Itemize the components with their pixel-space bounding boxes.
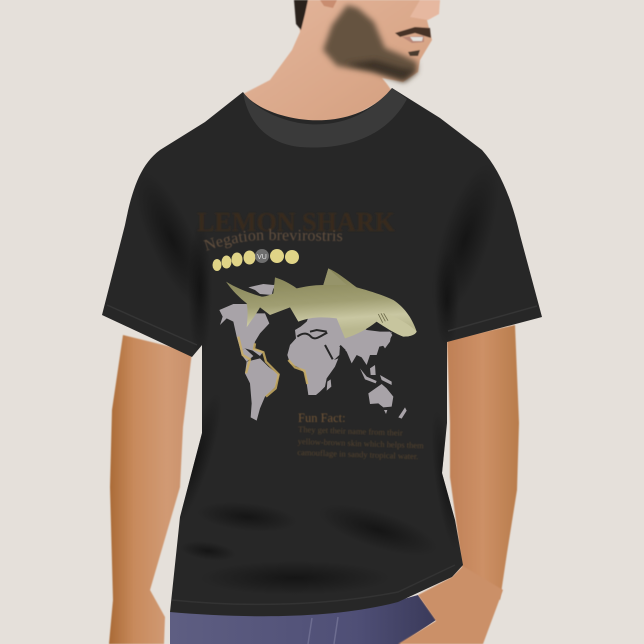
collar — [243, 88, 407, 147]
ear — [320, 0, 337, 8]
waist folds — [220, 509, 274, 525]
print: scientific name: Negation brevirostris — [204, 228, 342, 251]
fun fact heading: Fun Fact: — [298, 411, 346, 425]
model: head and neck — [243, 0, 440, 134]
central america — [241, 348, 253, 362]
greenland / arctic — [248, 283, 293, 295]
print: title: LEMON SHARK — [197, 207, 395, 237]
black t-shirt — [100, 85, 545, 620]
beard — [323, 5, 417, 82]
fun fact body: They get their name from their — [298, 424, 403, 438]
southeast asia islands — [360, 332, 392, 385]
new zealand — [398, 407, 407, 419]
lemon shark — [226, 268, 417, 338]
mouth — [402, 36, 424, 43]
fun fact text block — [297, 411, 425, 461]
jeans — [170, 595, 436, 644]
chin tuft — [408, 50, 420, 56]
mediterranean, black sea, red sea — [297, 330, 345, 359]
sleeve and armpit shadows — [151, 203, 191, 278]
teeth — [410, 37, 423, 41]
fun fact body: camouflage in sandy tropical water. — [297, 447, 419, 461]
side seam shadows — [181, 423, 210, 512]
north america — [219, 304, 269, 356]
eurasia and africa — [287, 313, 392, 395]
sleeve hems — [107, 305, 537, 345]
model: right arm — [447, 325, 519, 600]
dorsal fin shading — [323, 268, 347, 285]
fun fact body: yellow-brown skin which helps them — [298, 436, 424, 450]
model: left arm — [109, 335, 192, 644]
bottom hem — [172, 565, 455, 604]
head underside — [377, 312, 417, 337]
madagascar — [327, 379, 331, 391]
south america — [245, 358, 279, 421]
world range map — [219, 283, 407, 421]
hair — [294, 0, 308, 30]
jawline beard shadow — [345, 60, 416, 80]
nose — [410, 0, 440, 20]
australia — [368, 384, 393, 414]
range: coasts highlighted — [238, 337, 307, 397]
moustache — [395, 27, 431, 38]
conservation status scale — [212, 249, 299, 271]
hand in pocket — [398, 566, 503, 644]
conservation status scale: VU — [257, 254, 267, 261]
jeans fly — [308, 617, 338, 644]
gills — [378, 313, 388, 323]
